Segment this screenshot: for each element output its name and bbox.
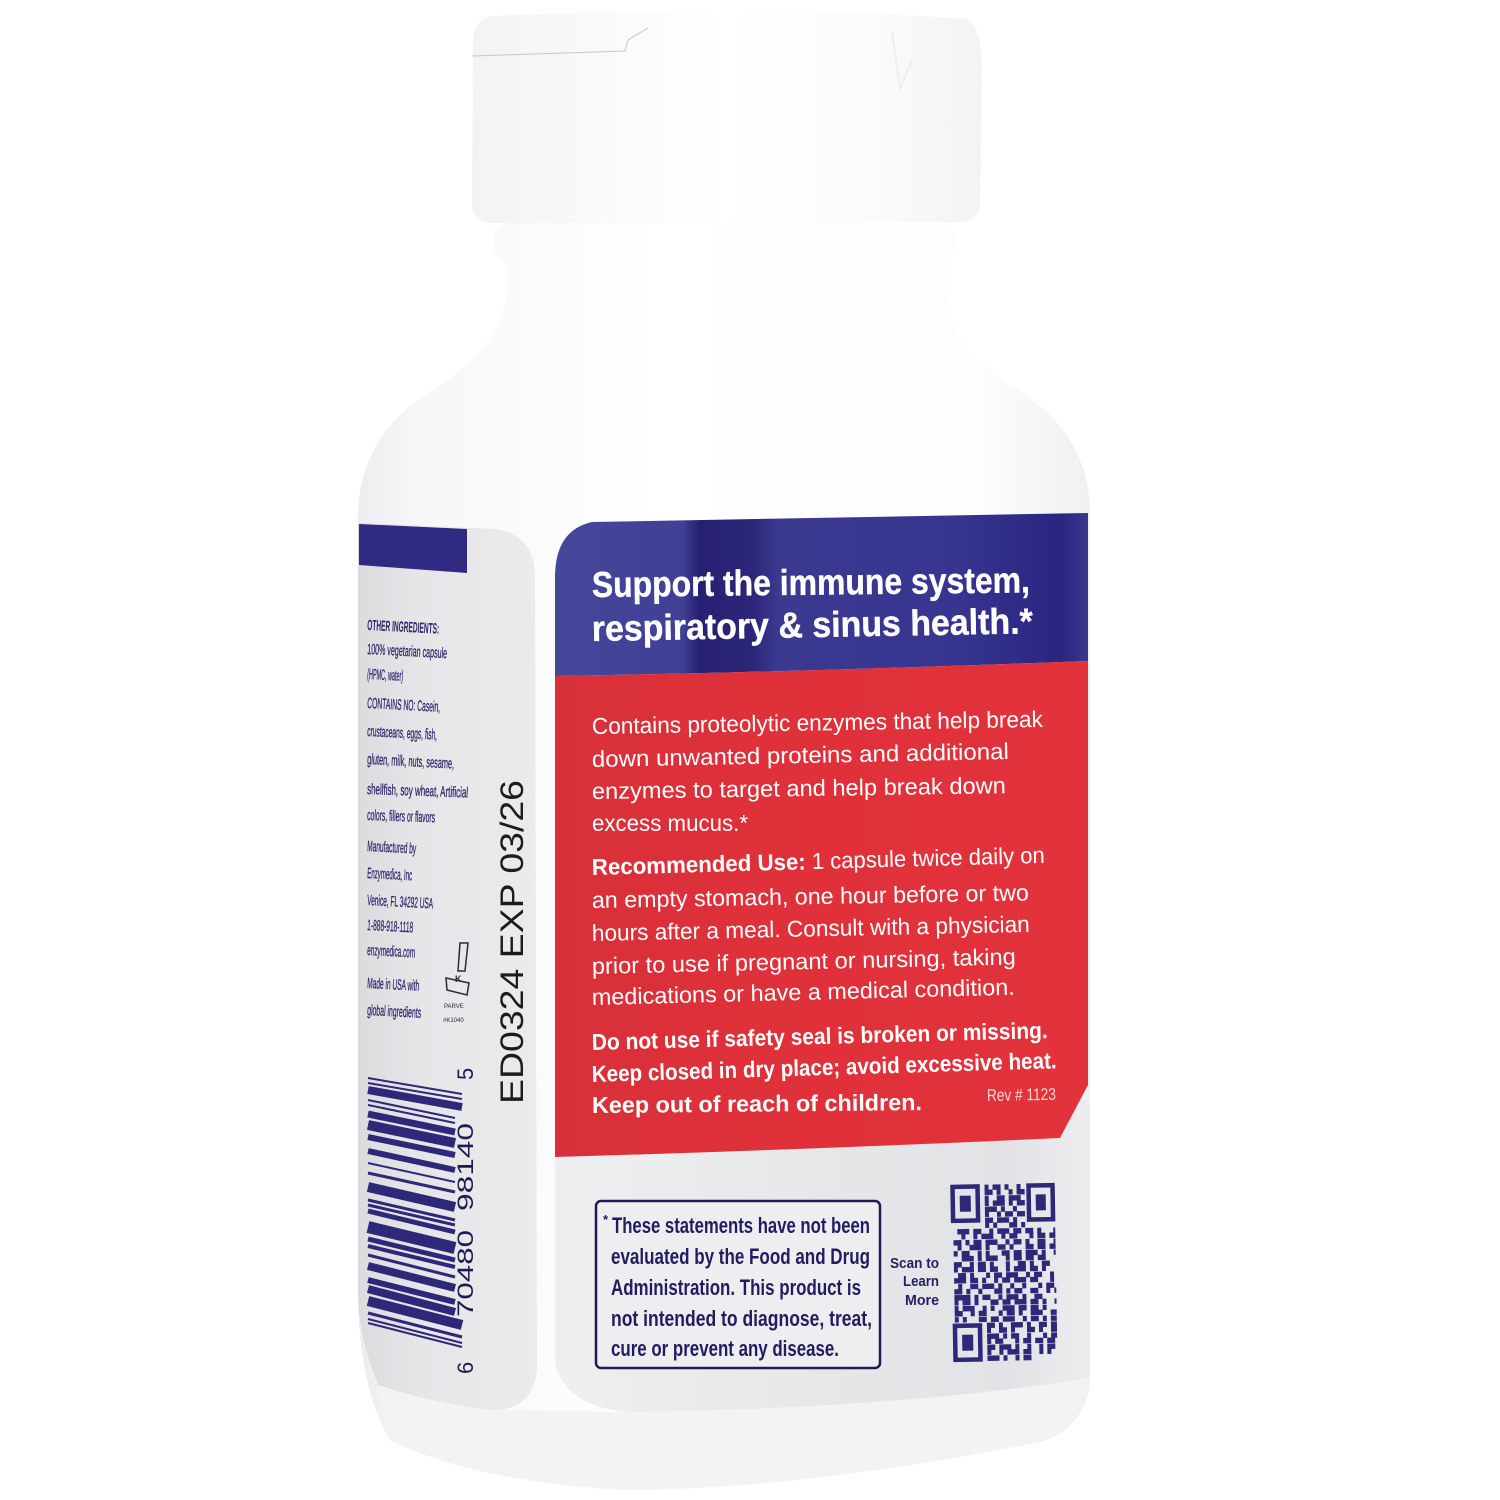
barcode digits: 6 [453,1362,478,1374]
contains no text [367,695,468,826]
icon: parve kosher mark: #K1040 [443,1018,464,1024]
left label panel: OTHER INGREDIENTS: [367,617,440,638]
recommended use paragraph: hours after a meal. Consult with a physician [592,911,1030,946]
revision number: Rev # 1123 [987,1085,1056,1105]
recommended use paragraph: an empty stomach, one hour before or two [592,879,1029,913]
QR code [953,1185,1058,1360]
description paragraph: Contains proteolytic enzymes that help break [592,706,1044,739]
scan prompt: Scan to [890,1255,939,1272]
contains no text: CONTAINS NO: Casein, [367,695,441,716]
description paragraph [592,706,1044,836]
warnings: Do not use if safety seal is broken or missing. [591,1017,1048,1055]
FDA disclaimer box: not intended to diagnose, treat, [611,1306,872,1331]
warnings [591,1017,1057,1118]
manufacturer text: 1-888-918-1118 [367,917,414,936]
barcode digits [453,1068,478,1374]
recommended use paragraph: Recommended Use: [591,848,806,880]
FDA disclaimer box: Administration. This product is [611,1275,861,1300]
right label lower panel [555,1100,1090,1412]
bottle neck and body [358,223,1090,1490]
warnings: Keep closed in dry place; avoid excessive heat. [591,1047,1057,1087]
barcode digits: 70480 [453,1230,478,1317]
recommended use paragraph: medications or have a medical condition. [591,974,1015,1010]
icon: parve kosher mark [443,943,469,1024]
icon: parve kosher mark: K [455,974,462,984]
blue heading panel [555,513,1088,676]
blue band on left label [359,524,467,573]
FDA disclaimer box: evaluated by the Food and Drug [611,1244,870,1269]
scan prompt: Learn [903,1273,939,1290]
barcode digits: 98140 [453,1123,478,1211]
contains no text: gluten, milk, nuts, sesame, [367,751,455,773]
FDA disclaimer box: * [603,1212,609,1227]
red information panel [555,661,1088,1157]
FDA disclaimer box: cure or prevent any disease. [611,1336,839,1361]
contains no text: colors, fillers or flavors [367,807,435,826]
contains no text: crustaceans, eggs, fish, [367,723,438,744]
other ingredients text [367,617,448,685]
scan prompt [890,1255,939,1309]
barcode [368,1078,462,1347]
manufacturer text: enzymedica.com [367,942,416,962]
expiry date stamp: ED0324 EXP 03/26 [494,780,530,1104]
FDA disclaimer box: These statements have not been [612,1213,870,1238]
recommended use paragraph: prior to use if pregnant or nursing, taking [592,943,1016,979]
heading: Support the immune system, [592,559,1030,605]
recommended use paragraph: 1 capsule twice daily on [811,842,1045,874]
barcode digits: 5 [453,1068,478,1080]
description paragraph: enzymes to target and help break down [592,772,1006,804]
manufacturer text: Made in USA with [367,975,420,995]
FDA disclaimer box [596,1201,880,1368]
description paragraph: excess mucus.* [592,810,748,836]
manufacturer text: global ingredients [367,1002,422,1022]
warnings: Keep out of reach of children. [592,1089,922,1118]
icon: parve kosher mark: PARVE [444,1004,464,1010]
other ingredients text: (HPMC, water) [367,666,404,685]
contains no text: shellfish, soy wheat, Artificial [367,781,468,802]
heading: respiratory & sinus health.* [591,600,1033,649]
manufacturer text: Enzymedica, Inc [367,865,413,884]
bottle base shading [378,1378,1090,1490]
description paragraph: down unwanted proteins and additional [592,738,1009,772]
recommended use paragraph [591,842,1045,1010]
manufacturer text [367,838,434,1022]
left label panel: Venice, FL 34292 USA [367,892,434,912]
left label panel: 100% vegetarian capsule [367,641,448,662]
scan prompt: More [905,1292,939,1309]
manufacturer text: Manufactured by [367,838,417,858]
bottle cap [472,11,982,223]
left label panel [358,523,537,1410]
heading [591,559,1033,649]
